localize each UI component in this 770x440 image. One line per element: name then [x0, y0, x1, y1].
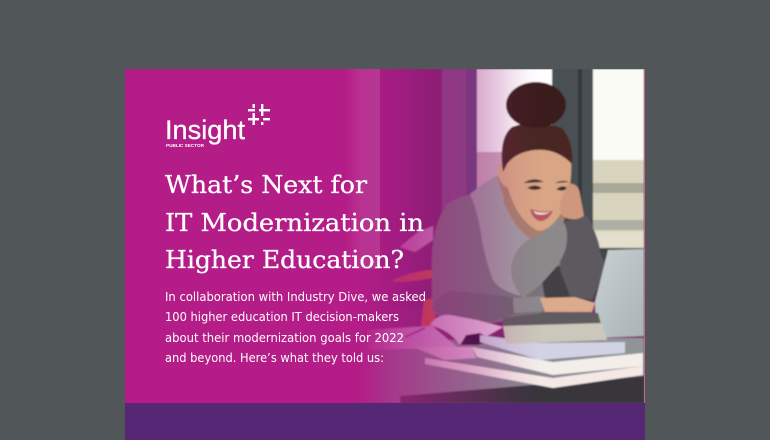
magenta fade overlay	[125, 69, 528, 403]
heading line 3: Higher Education?	[165, 246, 404, 274]
hair	[502, 123, 572, 172]
heading	[165, 171, 424, 274]
face	[498, 144, 571, 231]
scarf	[470, 175, 535, 297]
photo: woman	[432, 82, 606, 324]
body line 2: 100 higher education IT decision-makers	[165, 309, 399, 324]
logo subtitle: PUBLIC SECTOR	[166, 143, 205, 148]
second book	[480, 335, 625, 360]
panel: hero photo and magenta fade	[125, 69, 644, 403]
dark torso	[540, 262, 605, 302]
smile	[530, 209, 553, 221]
photo: laptop	[595, 249, 644, 338]
scarf front fold	[511, 218, 567, 297]
photo: full scene	[368, 69, 644, 403]
sleeve cuff	[513, 296, 545, 313]
typing hand	[540, 297, 595, 312]
hand on cheek	[560, 184, 584, 219]
body text	[165, 289, 426, 365]
top book pages	[503, 323, 607, 344]
heading line 2: IT Modernization in	[165, 209, 424, 237]
logo: Insight Public Sector	[165, 104, 270, 148]
curtain highlight	[352, 69, 380, 269]
body line 4: and beyond. Here’s what they told us:	[165, 350, 384, 365]
right sleeve	[560, 216, 606, 300]
heading line 1: What’s Next for	[165, 171, 368, 199]
panel: purple band	[125, 403, 645, 440]
body line 1: In collaboration with Industry Dive, we asked	[165, 289, 426, 304]
third book	[472, 347, 643, 375]
body line 3: about their modernization goals for 2022	[165, 330, 404, 345]
right edge accent	[644, 69, 645, 403]
top book cover	[503, 312, 601, 327]
photo: window and outdoor view	[477, 69, 644, 260]
sweater arm	[463, 293, 514, 322]
photo: desk	[369, 337, 644, 403]
infographic canvas	[125, 69, 645, 440]
photo: notebook and pen	[367, 315, 503, 350]
bottom book	[425, 358, 643, 388]
neck	[497, 176, 566, 240]
sweater body	[431, 194, 562, 324]
icon: logo mark	[248, 104, 270, 125]
photo: room and curtain	[378, 69, 644, 340]
photo: stack of books	[413, 312, 643, 388]
photo: chair and background object	[393, 226, 436, 328]
eyes and brows	[524, 180, 568, 190]
loose paper	[413, 347, 476, 360]
hair bun	[506, 82, 566, 128]
logo wordmark: Insight	[165, 115, 245, 145]
